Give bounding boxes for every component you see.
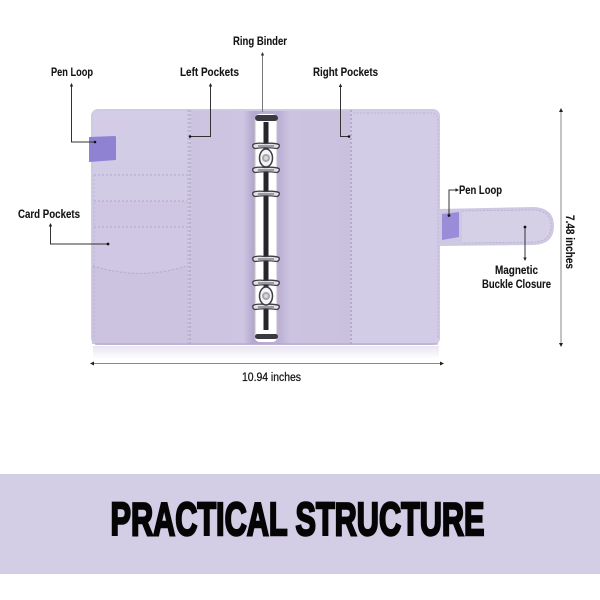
centre panel — [191, 111, 350, 344]
binder body — [91, 109, 440, 345]
width dimension — [90, 362, 444, 384]
label: magnetic buckle closure: Magnetic — [495, 265, 539, 277]
card pockets — [92, 175, 187, 344]
label: right pockets — [313, 67, 378, 138]
label: right pen loop: Pen Loop — [459, 185, 502, 197]
left pocket panel — [93, 110, 191, 344]
label: left pen loop: Pen Loop — [51, 67, 93, 79]
height dimension — [559, 108, 575, 347]
label: left pockets: Left Pockets — [180, 67, 239, 79]
icon: left pen loop — [89, 136, 116, 162]
binder reflection — [93, 346, 439, 359]
right pocket panel — [351, 110, 438, 344]
label: card pockets: Card Pockets — [18, 209, 80, 221]
height dimension: 7.48 inches — [563, 215, 575, 269]
label: ring binder — [233, 36, 287, 112]
label: card pockets — [18, 209, 109, 245]
label: right pen loop — [448, 185, 502, 217]
label: ring binder: Ring Binder — [233, 36, 287, 48]
magnetic strap — [438, 207, 554, 246]
width dimension: 10.94 inches — [242, 372, 301, 384]
ring binder mechanism — [253, 114, 279, 342]
banner — [0, 474, 600, 574]
label: right pockets: Right Pockets — [313, 67, 378, 79]
label: left pen loop — [51, 67, 96, 143]
icon: right pen loop — [442, 212, 459, 240]
label: left pockets — [180, 67, 239, 138]
label: magnetic buckle closure: Buckle Closure — [482, 279, 551, 291]
label: magnetic buckle closure — [482, 226, 551, 291]
